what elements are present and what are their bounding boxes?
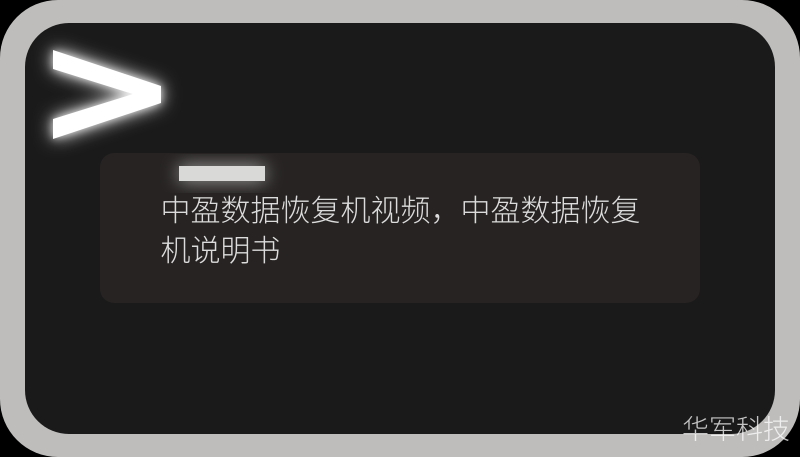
text panel bbox=[100, 153, 700, 303]
heading text: 中盈数据恢复机视频，中盈数据恢复机说明书 bbox=[160, 195, 640, 268]
watermark: 华军科技 bbox=[682, 415, 790, 445]
